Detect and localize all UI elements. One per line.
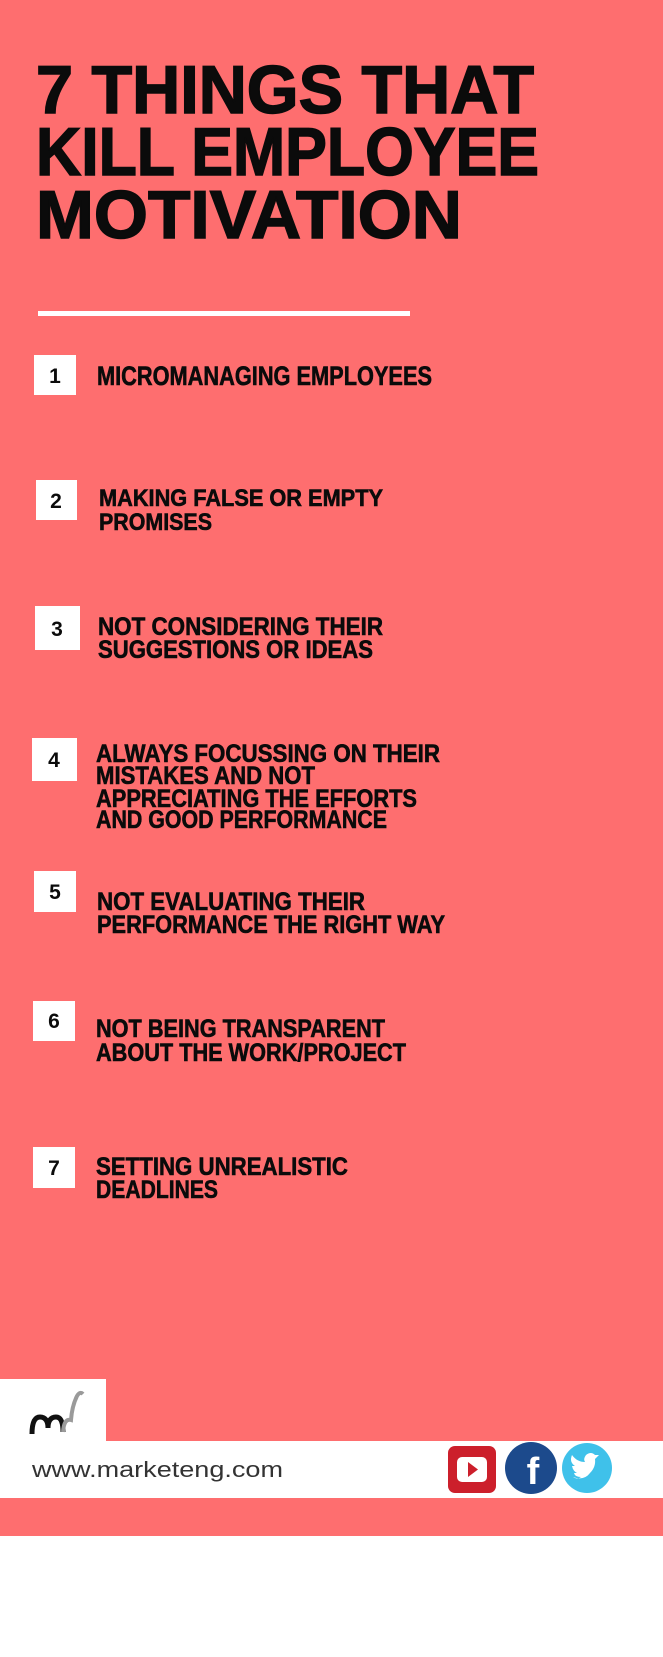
item 4: APPRECIATING THE EFFORTS [96,785,417,813]
item 7: DEADLINES [96,1176,218,1204]
item 5: PERFORMANCE THE RIGHT WAY [97,911,445,939]
item 6: 6 [48,1010,60,1033]
item 1: MICROMANAGING EMPLOYEES [97,361,432,391]
item 6 [33,1001,406,1067]
title [36,52,539,253]
footer band [0,1441,663,1498]
title: KILL EMPLOYEE [36,114,539,190]
item 5 [34,871,445,939]
item 3: NOT CONSIDERING THEIR [98,613,383,641]
item 2 [36,480,383,536]
icon: facebook: f [527,1451,540,1493]
item 3: SUGGESTIONS OR IDEAS [98,636,373,664]
logo box [0,1379,106,1441]
item 3 [35,606,383,664]
item 4 [32,738,440,834]
item 2: MAKING FALSE OR EMPTY [99,485,383,512]
item 3: 3 [51,618,63,641]
item 1 [34,355,432,395]
icon: facebook [505,1442,557,1494]
item 5: NOT EVALUATING THEIR [97,888,365,916]
item 7: SETTING UNREALISTIC [96,1153,348,1181]
item 2: 2 [50,490,62,513]
item 5: 5 [49,881,61,904]
item 7 [33,1147,348,1204]
icon: twitter [562,1443,612,1493]
item 7: 7 [48,1157,60,1180]
footer band: www.marketeng.com [31,1457,283,1482]
item 2: PROMISES [99,509,212,536]
item 6: ABOUT THE WORK/PROJECT [96,1039,406,1067]
item 4: AND GOOD PERFORMANCE [96,806,387,834]
item 4: ALWAYS FOCUSSING ON THEIR [96,740,440,768]
item 4: 4 [48,749,60,772]
item 6: NOT BEING TRANSPARENT [96,1015,385,1043]
title: MOTIVATION [36,177,462,253]
icon: youtube [448,1446,496,1493]
item 1: 1 [49,365,61,388]
item 4: MISTAKES AND NOT [96,762,315,790]
title: 7 THINGS THAT [36,52,534,128]
